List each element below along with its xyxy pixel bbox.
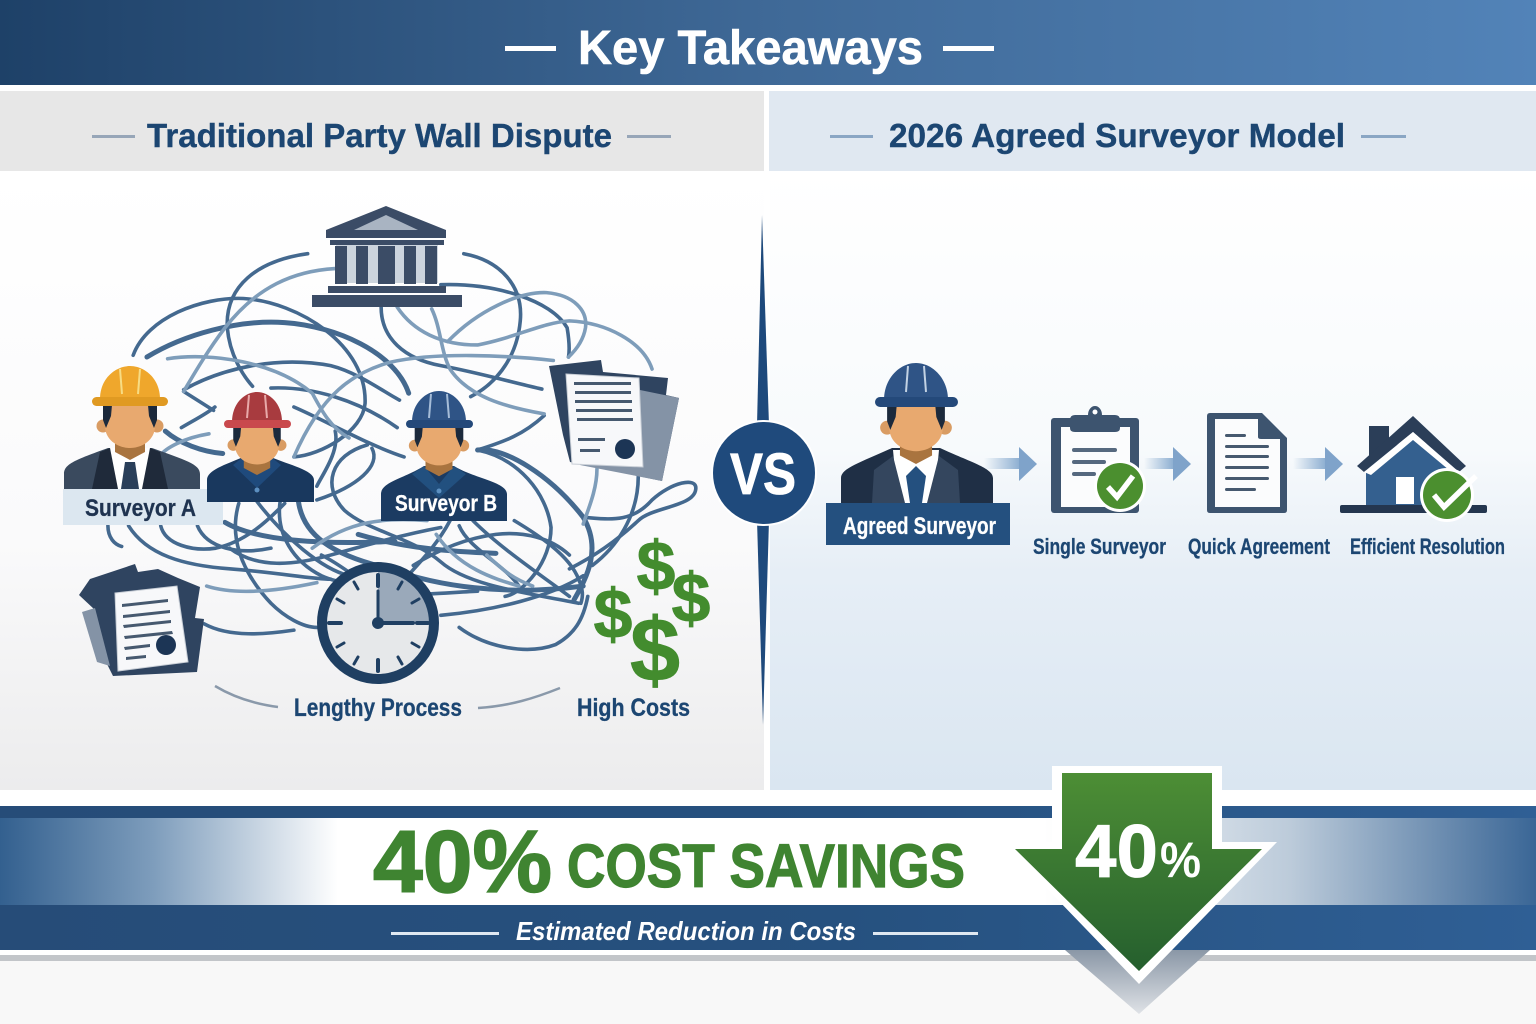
label: single surveyor: Single Surveyor bbox=[1033, 534, 1166, 559]
panel: traditional party wall dispute bbox=[0, 91, 764, 790]
savings banner: Estimated Reduction in Costs bbox=[516, 916, 856, 946]
agreed surveyor figure bbox=[826, 363, 1010, 545]
icon: document stack lower left bbox=[79, 564, 204, 676]
icon: house bbox=[1340, 416, 1487, 522]
arrow 1 bbox=[984, 447, 1037, 481]
icon: courthouse bbox=[312, 206, 462, 307]
surveyor A figure bbox=[63, 366, 223, 525]
surveyor B figure bbox=[381, 391, 507, 521]
panel: 2026 agreed surveyor model: 2026 Agreed Surveyor Model bbox=[889, 117, 1345, 154]
title banner: Key Takeaways bbox=[578, 22, 923, 75]
savings banner: 40% bbox=[373, 812, 552, 911]
tangled lines bbox=[108, 254, 696, 649]
callout: lengthy process: Lengthy Process bbox=[294, 694, 462, 722]
callout: lengthy process bbox=[215, 686, 560, 722]
panel: 2026 agreed surveyor model bbox=[769, 91, 1536, 790]
icon: document bbox=[1207, 413, 1287, 513]
savings banner bbox=[0, 790, 1536, 1024]
icon: dollar signs: $ bbox=[637, 527, 675, 605]
panel: traditional party wall dispute: Traditional Party Wall Dispute bbox=[147, 117, 612, 154]
VS badge bbox=[711, 420, 817, 526]
icon: dollar signs: $ bbox=[672, 559, 710, 637]
icon: clipboard bbox=[1051, 406, 1146, 513]
icon: dollar signs: $ bbox=[630, 601, 680, 701]
surveyor figure red hat bbox=[207, 392, 314, 502]
green down arrow 40% bbox=[1002, 766, 1277, 1014]
VS badge: VS bbox=[730, 442, 796, 507]
green down arrow 40%: 40 bbox=[1075, 809, 1158, 893]
centre divider spikes bbox=[757, 215, 769, 725]
label: quick agreement: Quick Agreement bbox=[1188, 534, 1330, 559]
callout: high costs: High Costs bbox=[577, 694, 690, 722]
icon: clock bbox=[322, 567, 434, 679]
surveyor B figure: Surveyor B bbox=[395, 490, 497, 516]
icon: dollar signs bbox=[594, 527, 710, 701]
agreed surveyor figure: Agreed Surveyor bbox=[843, 513, 996, 540]
arrow 3 bbox=[1293, 447, 1343, 481]
green down arrow 40%: % bbox=[1160, 832, 1201, 888]
savings banner: COST SAVINGS bbox=[567, 832, 965, 900]
surveyor A figure: Surveyor A bbox=[85, 495, 196, 522]
icon: document stack top right bbox=[549, 360, 679, 481]
icon: dollar signs: $ bbox=[594, 575, 632, 653]
title banner bbox=[0, 0, 1536, 85]
arrow 2 bbox=[1144, 447, 1191, 481]
